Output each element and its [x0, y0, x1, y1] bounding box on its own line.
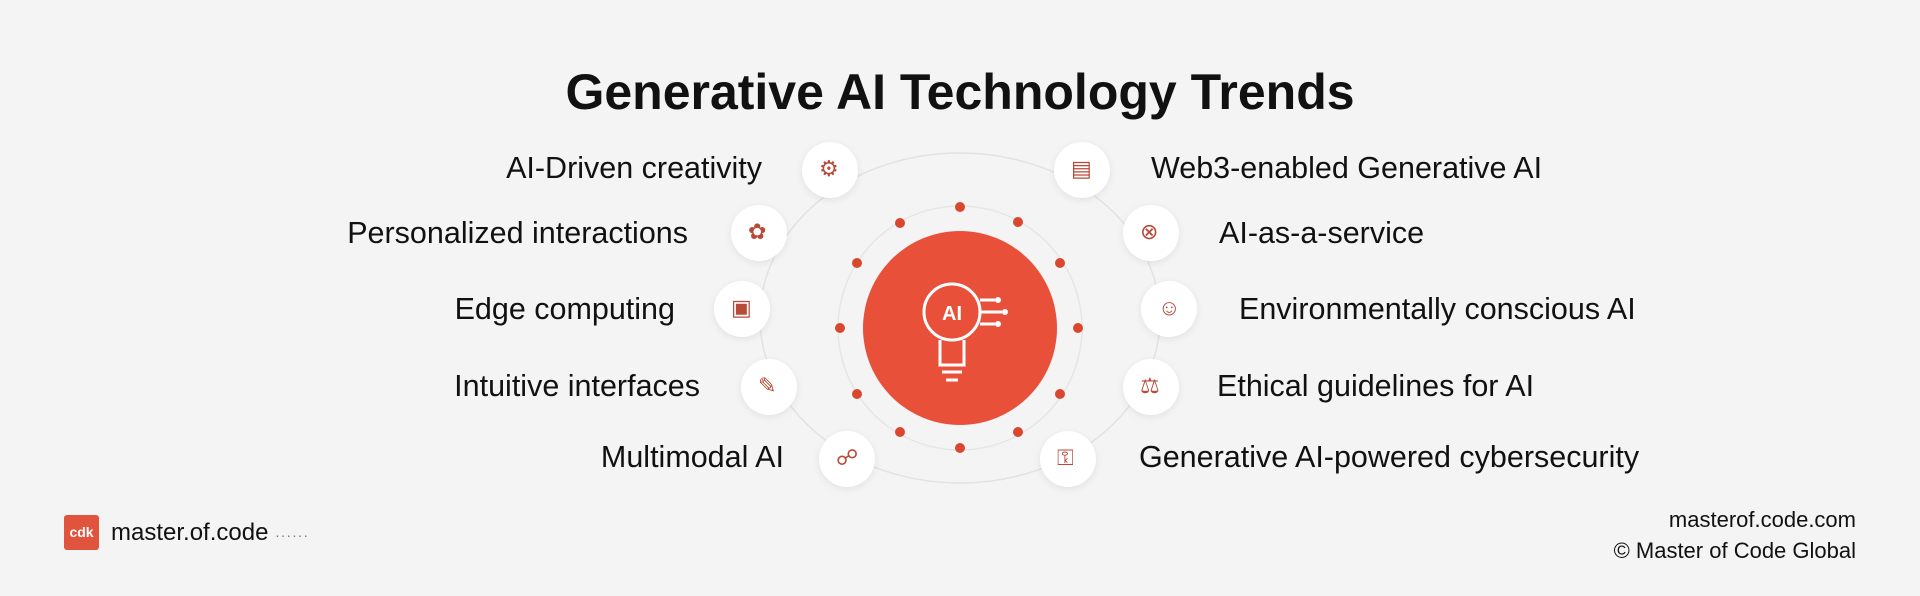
left labels: AI-Driven creativity: [506, 151, 762, 185]
footer: © Master of Code Global: [1614, 538, 1856, 563]
text: ✿: [748, 219, 766, 244]
title: Generative AI Technology Trends: [565, 64, 1355, 120]
text: Intuitive interfaces: [454, 369, 700, 403]
text: ✎: [758, 373, 776, 398]
text: Edge computing: [455, 292, 675, 326]
footer: [1614, 507, 1856, 563]
text: ⚖: [1140, 373, 1160, 398]
center circle: AI: [942, 303, 962, 325]
text: ⚙: [819, 156, 839, 181]
icon glyphs: [731, 156, 1180, 470]
logo: [64, 515, 309, 550]
text: Personalized interactions: [347, 216, 688, 250]
text: ▤: [1071, 156, 1092, 181]
text: Multimodal AI: [601, 440, 784, 474]
text: ▣: [731, 295, 752, 320]
text: Environmentally conscious AI: [1239, 292, 1636, 326]
text: ⊗: [1140, 219, 1158, 244]
logo: master.of.code ······: [111, 519, 309, 546]
logo: cdk: [69, 524, 94, 540]
icons: [802, 142, 858, 198]
ring dots: [835, 202, 1083, 453]
text: Generative AI-powered cybersecurity: [1139, 440, 1639, 474]
text: AI-as-a-service: [1219, 216, 1424, 250]
footer: masterof.code.com: [1669, 507, 1856, 532]
center circle: [863, 231, 1057, 425]
text: ☍: [836, 445, 858, 470]
text: Ethical guidelines for AI: [1217, 369, 1534, 403]
text: ☺: [1158, 295, 1180, 320]
right labels: Web3-enabled Generative AI: [1151, 151, 1542, 185]
text: ⚿: [1057, 445, 1074, 470]
